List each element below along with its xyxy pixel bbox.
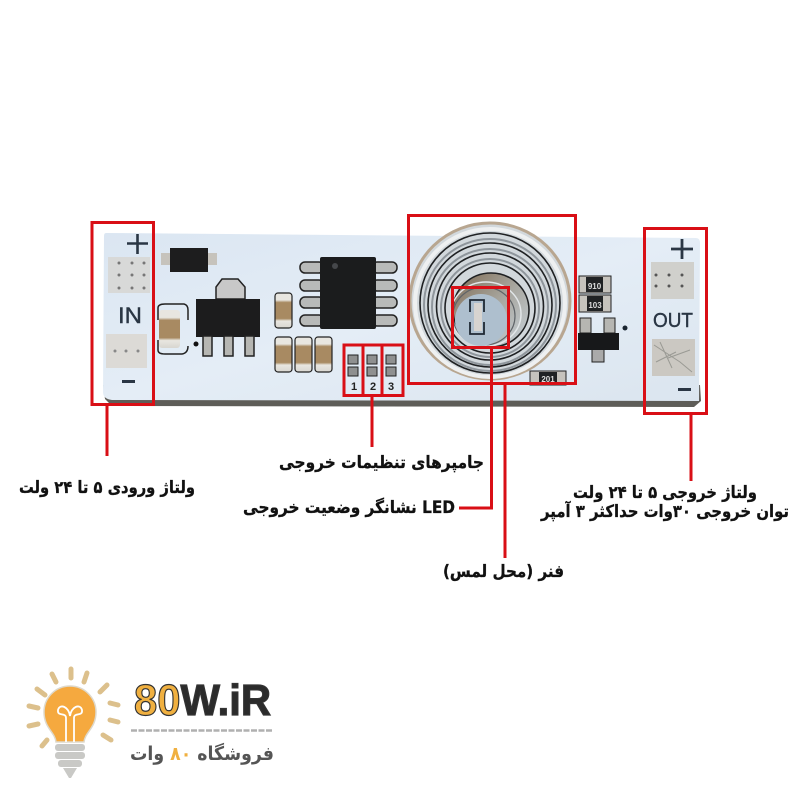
leader lines	[107, 348, 691, 558]
box: output	[644, 228, 706, 414]
board surface	[103, 233, 700, 401]
status LED	[470, 300, 484, 334]
silk: IN: IN	[118, 303, 142, 328]
logo persian tagline: فروشگاه ۸۰ وات	[130, 742, 274, 765]
jumper pads: 2	[370, 381, 376, 393]
input pad plus	[108, 257, 150, 293]
output pad plus	[651, 262, 694, 299]
touch spring	[410, 223, 570, 379]
silk: plus IN	[127, 234, 148, 254]
resistors: 103	[588, 301, 602, 310]
label: input voltage: ولتاژ ورودی ۵ تا ۲۴ ولت	[19, 478, 195, 498]
leader: input	[106, 405, 108, 456]
capacitor left	[158, 304, 188, 354]
regulator	[194, 279, 260, 356]
jumper pads: 3	[388, 381, 394, 393]
jumper pads	[348, 355, 396, 393]
silk: minus OUT	[678, 388, 691, 391]
output pad minus	[652, 339, 695, 376]
logo wordmark: 80W.iR	[134, 676, 271, 725]
input pad minus	[106, 334, 147, 368]
label: spring: فنر (محل لمس)	[443, 562, 564, 582]
red callout boxes	[92, 216, 706, 414]
jumper pads: 1	[351, 381, 357, 393]
label: output voltage: ولتاژ خروجی ۵ تا ۲۴ ولت	[573, 483, 757, 503]
leader: output	[690, 414, 692, 481]
box: LED	[452, 288, 508, 348]
logo divider	[131, 729, 273, 732]
box: input	[92, 222, 154, 404]
leader: spring	[504, 384, 506, 558]
silk: minus IN	[122, 380, 135, 383]
icon: light bulb	[29, 669, 118, 778]
resistors	[530, 276, 611, 385]
diode	[161, 248, 217, 272]
IC chip	[300, 257, 397, 329]
leader: jumpers	[370, 396, 374, 447]
box: spring	[408, 216, 576, 384]
transistor	[578, 318, 628, 362]
label: LED: LED نشانگر وضعیت خروجی	[243, 497, 455, 518]
resistors: 201	[541, 375, 555, 384]
circuit board	[103, 223, 701, 407]
leader: LED	[459, 348, 492, 508]
silk: OUT: OUT	[653, 310, 693, 332]
label: output power: توان خروجی ۳۰وات حداکثر ۳ آمپر	[540, 500, 789, 522]
silk: plus OUT	[671, 239, 693, 259]
board edge shadow	[103, 385, 701, 407]
logo	[29, 669, 274, 778]
resistors: 910	[588, 282, 602, 291]
box: jumpers	[344, 345, 403, 396]
small capacitors	[275, 293, 332, 372]
label: jumpers: جامپرهای تنظیمات خروجی	[279, 453, 484, 473]
